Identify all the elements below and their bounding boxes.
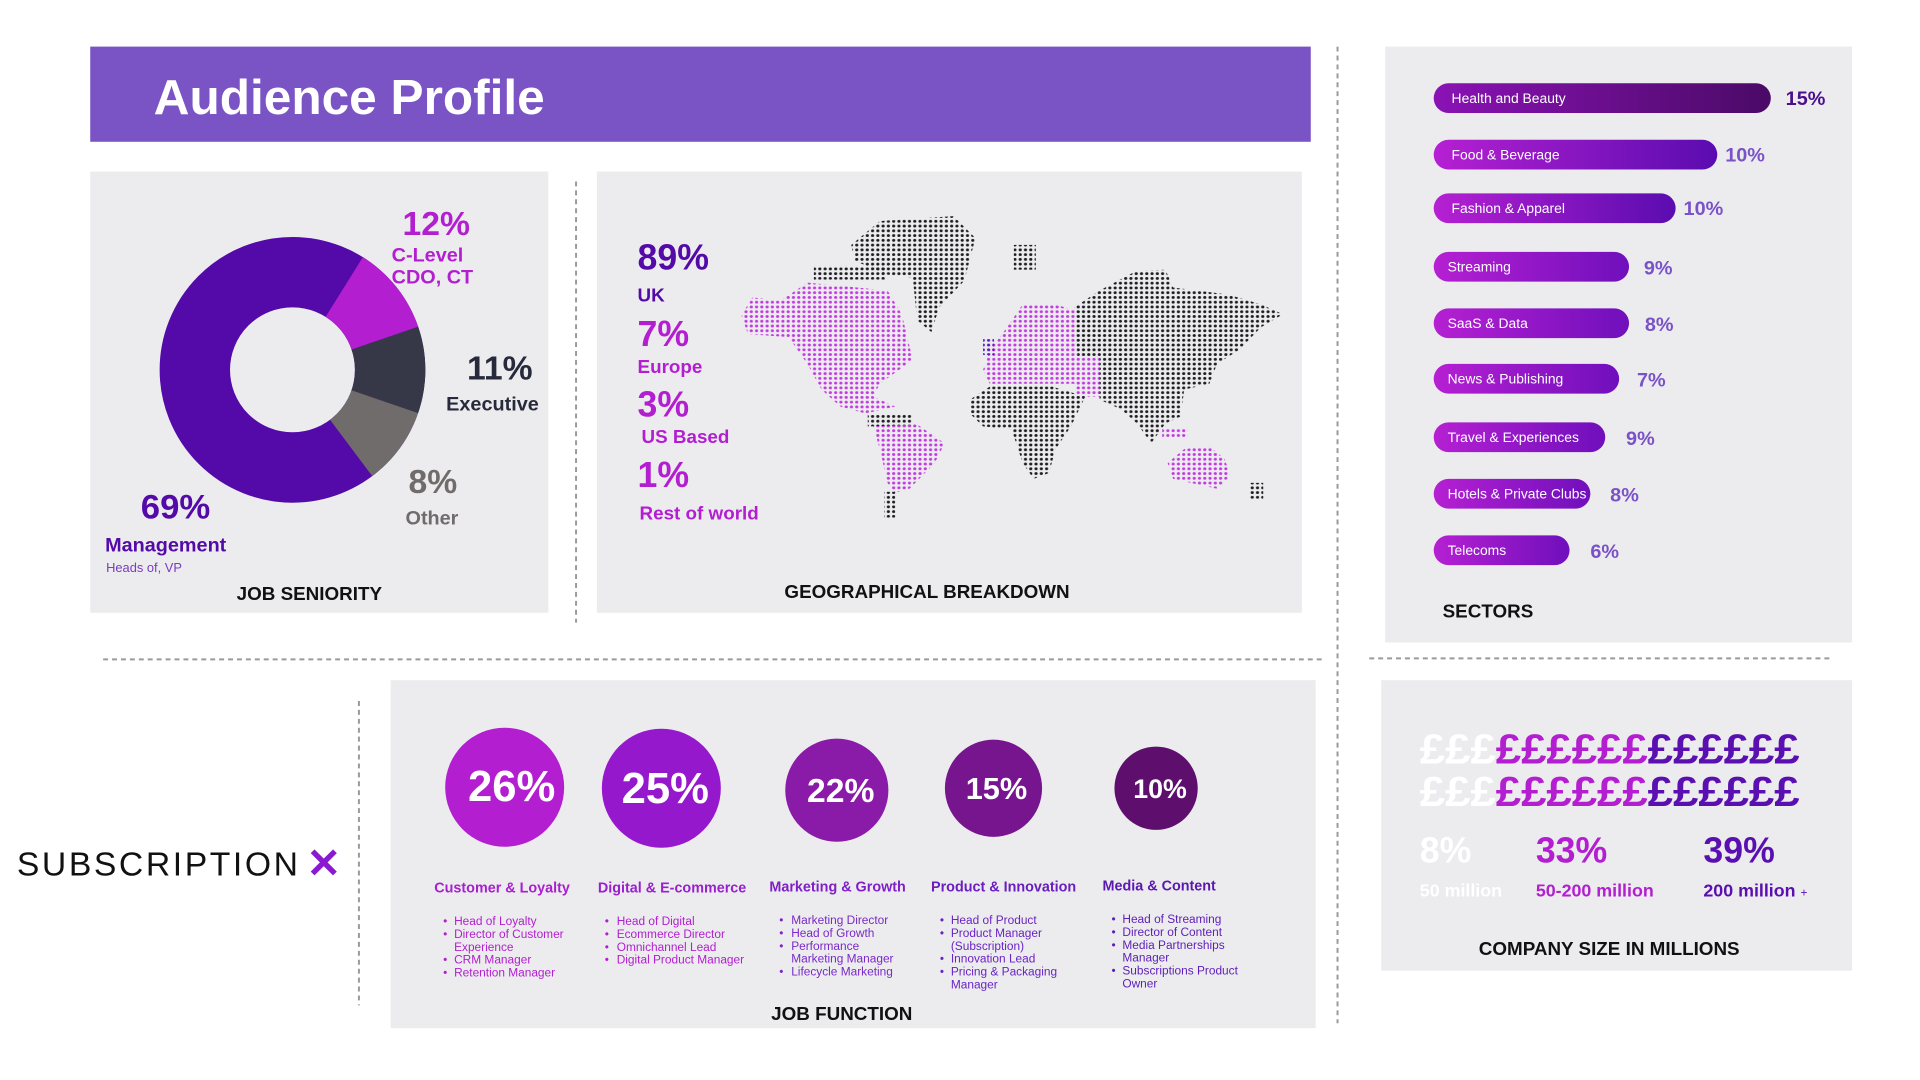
donut chart [195, 272, 390, 467]
heading: JOB SENIORITY [237, 583, 383, 604]
heading: SECTORS [1443, 601, 1533, 622]
bar: Telecoms: Telecoms [1448, 542, 1506, 558]
bar: Health and Beauty: 15% [1786, 88, 1826, 110]
bar: News & Publishing [1434, 364, 1666, 394]
lists: • [940, 913, 944, 927]
bar: SaaS & Data: SaaS & Data [1448, 315, 1528, 331]
lists: • [940, 952, 944, 966]
lists: CRM Manager [454, 953, 531, 967]
lists: • [779, 926, 783, 940]
lists: Manager [951, 978, 998, 992]
bar: Streaming: Streaming [1448, 259, 1511, 275]
headings: Media & Content [1103, 878, 1216, 894]
logo: SUBSCRIPTION [17, 845, 301, 883]
bar: Hotels & Private Clubs: Hotels & Private Clubs [1448, 486, 1586, 502]
stats [1420, 831, 1808, 900]
lists: • [443, 953, 447, 967]
bar: Hotels & Private Clubs: 8% [1610, 485, 1639, 507]
stats: 3% [638, 384, 689, 424]
bar: Hotels & Private Clubs [1434, 479, 1639, 509]
lists: Head of Product [951, 913, 1037, 927]
headings: Customer & Loyalty [434, 880, 570, 896]
lists: • [605, 927, 609, 941]
title: Audience Profile [154, 69, 545, 125]
circles: 26% [468, 763, 555, 811]
lists: • [605, 953, 609, 967]
lists: Innovation Lead [951, 952, 1035, 966]
stats: 50 million [1420, 880, 1502, 900]
lists: • [605, 940, 609, 954]
lists: Media Partnerships [1122, 938, 1225, 952]
bar: Health and Beauty: Health and Beauty [1452, 90, 1566, 106]
lists: Director of Customer [454, 927, 564, 941]
circles [445, 728, 1198, 848]
bar: Travel & Experiences [1434, 422, 1655, 452]
bar: Food & Beverage: Food & Beverage [1452, 147, 1560, 163]
circles: 22% [807, 772, 875, 810]
lists: • [605, 914, 609, 928]
lists: Performance [791, 939, 860, 953]
lists: • [940, 926, 944, 940]
lists: • [1111, 912, 1116, 926]
bar: Food & Beverage [1434, 140, 1765, 170]
bar: Streaming [1434, 252, 1673, 282]
lists: Omnichannel Lead [617, 940, 716, 954]
panel: sectors [1385, 47, 1852, 642]
bar: Travel & Experiences: Travel & Experiences [1448, 429, 1579, 445]
lists: • [1111, 925, 1116, 939]
bar: Food & Beverage: 10% [1725, 145, 1765, 167]
lists: • [940, 965, 944, 979]
stats: 50-200 million [1536, 880, 1654, 900]
bar: Telecoms [1434, 535, 1619, 565]
lists: • [1111, 938, 1116, 952]
heading: JOB FUNCTION [771, 1003, 912, 1024]
lists: • [779, 965, 783, 979]
label: management [105, 489, 227, 575]
bar: News & Publishing: News & Publishing [1448, 371, 1563, 387]
lists [443, 912, 1239, 992]
lists: • [779, 939, 783, 953]
lists: Head of Digital [617, 914, 695, 928]
headings: Digital & E-commerce [598, 880, 746, 896]
stats: 8% [1420, 831, 1471, 871]
circles: 10% [1133, 774, 1187, 804]
label: other: Other [406, 508, 459, 530]
bar: SaaS & Data [1434, 308, 1674, 338]
headings: Product & Innovation [931, 879, 1076, 895]
pound icons [1420, 725, 1800, 815]
lists: Head of Streaming [1122, 912, 1221, 926]
bar: Travel & Experiences: 9% [1626, 428, 1655, 450]
label: executive: 11% [467, 350, 533, 388]
panel: job function [391, 680, 1316, 1028]
lists: (Subscription) [951, 939, 1024, 953]
stats: US Based [642, 426, 729, 447]
lists: Pricing & Packaging [951, 965, 1057, 979]
bar: News & Publishing: 7% [1637, 370, 1666, 392]
stats: UK [638, 284, 665, 305]
bar: Streaming: 9% [1644, 258, 1673, 280]
label: management: Management [105, 534, 227, 556]
lists: • [443, 927, 447, 941]
headings: Marketing & Growth [769, 879, 906, 895]
bar: Fashion & Apparel: 10% [1684, 198, 1724, 220]
label: C-level [392, 205, 473, 289]
lists: Experience [454, 940, 514, 954]
lists: Owner [1122, 977, 1157, 991]
stats: Rest of world [640, 503, 759, 524]
panel: geographical breakdown [597, 172, 1302, 613]
dotted world map [741, 216, 1283, 518]
lists: Head of Growth [791, 926, 874, 940]
lists: Head of Loyalty [454, 914, 537, 928]
label: management: Heads of, VP [106, 560, 182, 575]
pound icons: £££££££££ ££££££ [1420, 725, 1800, 772]
lists: Marketing Manager [791, 952, 894, 966]
stats: 39% [1703, 831, 1775, 871]
lists: Retention Manager [454, 966, 555, 980]
stats: Europe [638, 356, 702, 377]
label: other [406, 463, 459, 530]
title bar [90, 47, 1311, 142]
logo: ✕ [306, 839, 341, 886]
stats [638, 238, 759, 524]
lists: Marketing Director [791, 913, 888, 927]
lists: Digital Product Manager [617, 953, 744, 967]
lists: Subscriptions Product [1122, 964, 1239, 978]
lists: • [1111, 964, 1116, 978]
lists: • [443, 914, 447, 928]
stats: 1% [638, 455, 689, 495]
lists: • [779, 913, 783, 927]
label: C-level: 12% [403, 205, 470, 243]
stats: 7% [638, 314, 689, 354]
lists: • [443, 966, 447, 980]
lists: Manager [1122, 951, 1169, 965]
lists: Director of Content [1122, 925, 1223, 939]
circles: 15% [966, 771, 1027, 806]
heading: GEOGRAPHICAL BREAKDOWN [784, 581, 1070, 602]
bar: SaaS & Data: 8% [1645, 314, 1674, 336]
bar: Fashion & Apparel [1434, 193, 1724, 223]
stats: 33% [1536, 831, 1607, 871]
bar: Telecoms: 6% [1590, 541, 1619, 563]
bar: Health and Beauty [1434, 83, 1826, 113]
label: management: 69% [141, 489, 210, 527]
lists: Product Manager [951, 926, 1042, 940]
label: C-level: CDO, CT [392, 267, 473, 289]
label: other: 8% [408, 463, 457, 501]
headings [434, 878, 1216, 896]
label: C-level: C-Level [392, 245, 463, 267]
stats: 200 million + [1703, 880, 1808, 900]
label: executive [446, 350, 539, 415]
lists: Lifecycle Marketing [791, 965, 893, 979]
panel: company size [1381, 680, 1852, 971]
bar: Fashion & Apparel: Fashion & Apparel [1452, 200, 1565, 216]
panel: job seniority [90, 172, 548, 613]
label: executive: Executive [446, 393, 539, 415]
heading: COMPANY SIZE IN MILLIONS [1479, 938, 1740, 959]
pound icons: £££££££££ ££££££ [1420, 768, 1800, 815]
lists: Ecommerce Director [617, 927, 725, 941]
stats: 89% [638, 238, 709, 278]
circles: 25% [622, 765, 709, 813]
